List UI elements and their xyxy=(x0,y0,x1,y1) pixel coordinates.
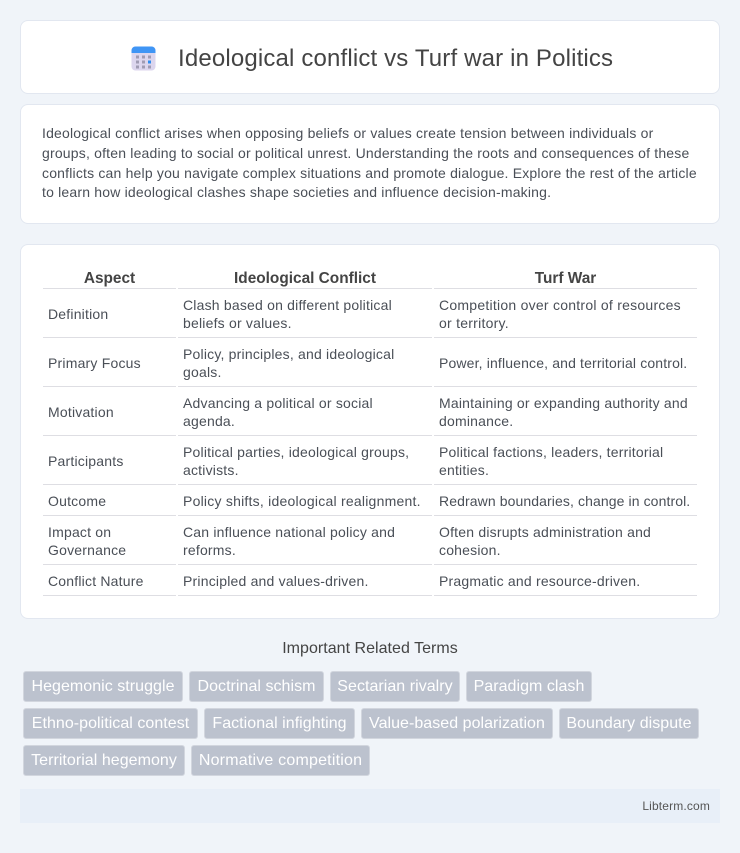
tag: Normative competition xyxy=(199,752,362,769)
Conflict Nature: turf: Pragmatic and resource-driven. xyxy=(439,573,640,589)
column heading: Turf War: Turf War xyxy=(535,270,596,287)
tag xyxy=(23,708,198,739)
Impact: ideological xyxy=(183,524,395,558)
intro text: conflicts can help you navigate complex situations and promote dialogue. Explore the rest of the article xyxy=(42,165,697,181)
tag xyxy=(204,708,355,739)
icon: calendar xyxy=(132,46,156,70)
tag: Paradigm clash xyxy=(474,678,584,695)
Conflict Nature: ideological: Principled and values-driven. xyxy=(183,573,369,589)
Outcome: ideological: Policy shifts, ideological realignment. xyxy=(183,493,421,509)
Motivation: ideological: Advancing a political or social xyxy=(183,395,373,411)
header card xyxy=(20,20,720,94)
row: Motivation: Motivation xyxy=(48,404,114,420)
column heading: Aspect: Aspect xyxy=(84,270,135,287)
tag: Doctrinal schism xyxy=(198,678,316,695)
table card xyxy=(20,244,720,619)
Impact: ideological: reforms. xyxy=(183,542,236,558)
Definition: ideological: beliefs or values. xyxy=(183,315,292,331)
tag: Ethno-political contest xyxy=(32,715,189,732)
Participants: ideological xyxy=(183,444,409,478)
Impact: turf: cohesion. xyxy=(439,542,501,558)
related terms heading: Important Related Terms xyxy=(282,640,458,657)
Primary Focus: turf: Power, influence, and territorial control. xyxy=(439,355,687,371)
Participants: ideological: Political parties, ideological groups, xyxy=(183,444,409,460)
row: Participants: Participants xyxy=(48,453,124,469)
tag: Territorial hegemony xyxy=(31,752,177,769)
tag xyxy=(191,745,370,776)
intro text xyxy=(42,125,697,200)
footer bar xyxy=(20,789,720,823)
Primary Focus: ideological: goals. xyxy=(183,364,222,380)
Motivation: ideological: agenda. xyxy=(183,413,235,429)
Motivation: turf: Maintaining or expanding authority and xyxy=(439,395,688,411)
tag xyxy=(189,671,324,702)
tag xyxy=(559,708,699,739)
Impact: turf: Often disrupts administration and xyxy=(439,524,651,540)
tag: Hegemonic struggle xyxy=(31,678,175,695)
title: Ideological conflict vs Turf war in Politics xyxy=(178,45,613,72)
tag: Boundary dispute xyxy=(566,715,692,732)
tag xyxy=(23,745,185,776)
Motivation: turf: dominance. xyxy=(439,413,513,429)
row: Impact on Governance: Governance xyxy=(48,542,126,558)
Motivation: turf xyxy=(439,395,688,429)
Primary Focus: ideological xyxy=(183,346,394,380)
Impact: turf xyxy=(439,524,651,558)
column heading: Ideological Conflict: Ideological Conflict xyxy=(234,270,376,287)
Definition: ideological: Clash based on different political xyxy=(183,297,392,313)
tag: Factional infighting xyxy=(212,715,347,732)
row: Primary Focus: Primary Focus xyxy=(48,355,141,371)
Definition: ideological xyxy=(183,297,392,331)
Definition: turf xyxy=(439,297,681,331)
intro text: Ideological conflict arises when opposing beliefs or values create tension between individuals or xyxy=(42,125,653,141)
Participants: turf: Political factions, leaders, territorial xyxy=(439,444,663,460)
footer credit: Libterm.com xyxy=(642,799,710,813)
Motivation: ideological xyxy=(183,395,373,429)
Primary Focus: ideological: Policy, principles, and ideological xyxy=(183,346,394,362)
tag xyxy=(466,671,592,702)
tag: Sectarian rivalry xyxy=(337,678,453,695)
tag xyxy=(23,671,183,702)
Participants: turf: entities. xyxy=(439,462,489,478)
tag xyxy=(361,708,553,739)
Definition: turf: or territory. xyxy=(439,315,509,331)
row: Impact on Governance xyxy=(48,524,126,558)
Impact: ideological: Can influence national policy and xyxy=(183,524,395,540)
intro text: to learn how ideological clashes shape societies and influence decision-making. xyxy=(42,184,551,200)
row: Definition: Definition xyxy=(48,306,108,322)
Definition: turf: Competition over control of resources xyxy=(439,297,681,313)
tag xyxy=(330,671,460,702)
intro text: groups, often leading to social or political unrest. Understanding the roots and consequences of these xyxy=(42,145,689,161)
row: Conflict Nature: Conflict Nature xyxy=(48,573,144,589)
row: Outcome: Outcome xyxy=(48,493,106,509)
Participants: ideological: activists. xyxy=(183,462,239,478)
row: Impact on Governance: Impact on xyxy=(48,524,111,540)
Outcome: turf: Redrawn boundaries, change in control. xyxy=(439,493,690,509)
tag: Value-based polarization xyxy=(369,715,545,732)
Participants: turf xyxy=(439,444,663,478)
intro card xyxy=(20,104,720,224)
